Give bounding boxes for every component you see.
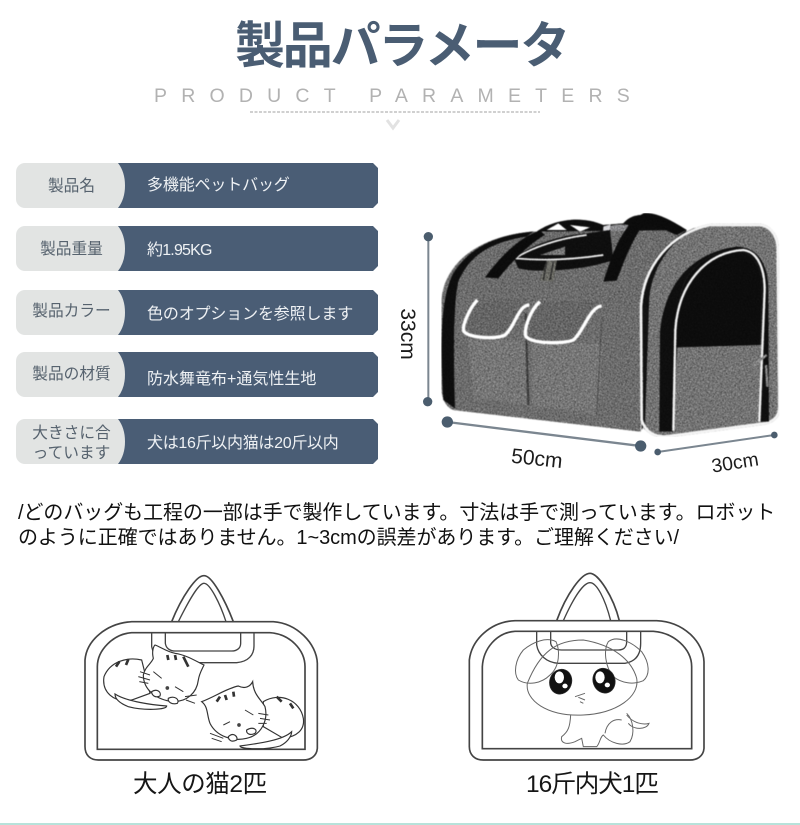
note text: のように正確ではありません。1~3cmの誤差があります。ご理解ください/ <box>18 527 679 549</box>
cat two <box>202 682 304 749</box>
illustration: bag with one dog <box>468 572 705 761</box>
spec row: material: 防水舞竜布+通気性生地 <box>147 371 316 388</box>
title: 製品パラメータ <box>235 18 568 74</box>
spec row: suitable size: 犬は16斤以内猫は20斤以内 <box>147 435 338 452</box>
handles <box>485 213 687 282</box>
bag top and handles <box>523 215 687 263</box>
black left zip edge <box>441 231 533 408</box>
bag outline <box>85 576 317 760</box>
spec row: material <box>16 352 378 397</box>
label 33cm: 33cm <box>396 308 419 360</box>
product photo: pet carrier bag with dimensions <box>396 213 780 478</box>
spec row: material: 製品の材質 <box>32 366 111 383</box>
bottom edge line <box>0 823 800 825</box>
side zipper pull <box>754 355 767 387</box>
spec row: colour: 製品カラー <box>32 303 111 320</box>
door zip edge <box>659 247 769 432</box>
note text <box>18 502 775 549</box>
spec row: product name: 多機能ペットバッグ <box>147 177 290 194</box>
top flap <box>514 230 613 282</box>
spec row: product name <box>16 163 378 208</box>
bag front body <box>442 230 687 432</box>
spec row: weight: 製品重量 <box>40 241 103 258</box>
bag outline <box>469 573 704 760</box>
spec row: product name: 製品名 <box>48 178 95 195</box>
label 30cm: 30cm <box>710 449 760 478</box>
dog eyes <box>546 665 619 697</box>
spec row: weight <box>16 226 378 271</box>
front pockets <box>464 300 603 415</box>
white side piping <box>641 225 779 436</box>
spec row: suitable size <box>16 419 378 464</box>
carrier bag <box>441 213 779 437</box>
label 50cm: 50cm <box>510 445 564 473</box>
side panel <box>643 225 778 437</box>
spec row: colour: 色のオプションを参照します <box>147 306 353 323</box>
dimension: width <box>442 416 646 452</box>
spec row: colour <box>16 290 378 335</box>
caption: one dog under 16 jin: 16斤内犬1匹 <box>526 771 658 798</box>
black side rim <box>641 226 703 430</box>
spec row: weight: 約1.95KG <box>147 242 212 259</box>
caption: two adult cats: 大人の猫2匹 <box>133 771 267 798</box>
dimension: depth <box>654 432 778 455</box>
dog <box>516 639 649 747</box>
dotted divider and chevron <box>250 111 540 130</box>
cat one <box>104 645 204 709</box>
note text: /どのバッグも工程の一部は手で製作しています。寸法は手で測っています。ロボット <box>18 502 775 524</box>
mesh window <box>677 251 762 347</box>
spec row: suitable size: 大きさに合 <box>32 425 111 442</box>
illustration: bag with two cats <box>84 574 318 761</box>
dimension: height <box>423 232 433 406</box>
subtitle: PRODUCT PARAMETERS <box>154 85 644 107</box>
spec row: suitable size: っています <box>33 445 110 462</box>
